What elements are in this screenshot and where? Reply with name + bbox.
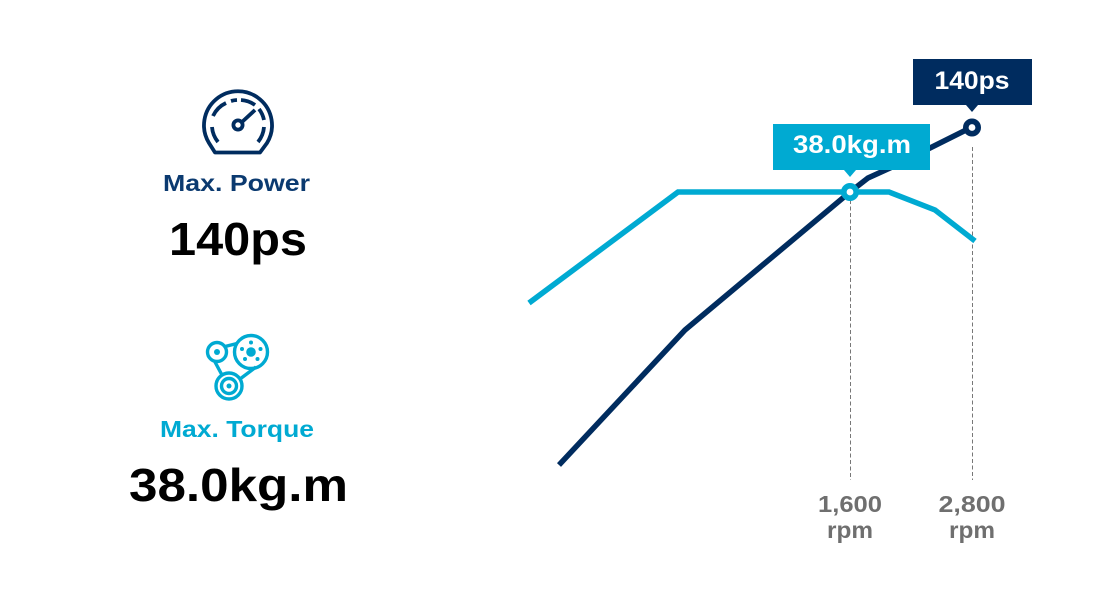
guide line: 2,800 rpm [972, 147, 974, 480]
guide line: 1,600 rpm [850, 200, 852, 480]
heading: max torque: Max. Torque [160, 416, 314, 442]
value: max torque: 38.0kg.m [129, 459, 348, 511]
axis label: 1,600 rpm: 1,600 [818, 491, 882, 517]
line chart [529, 59, 1032, 543]
icon: speedometer [204, 91, 272, 152]
callout: 38.0kg.m: 38.0kg.m [793, 131, 911, 159]
axis label: 2,800 rpm: rpm [949, 517, 995, 543]
marker: power peak [966, 121, 978, 134]
axis label: 1,600 rpm [818, 491, 882, 543]
power curve [559, 127, 972, 465]
callout: 140ps [913, 59, 1032, 112]
icon: belt pulleys [208, 336, 268, 399]
axis label: 2,800 rpm: 2,800 [938, 491, 1006, 517]
torque curve [529, 192, 975, 303]
value: max power: 140ps [169, 213, 307, 265]
heading: max power: Max. Power [163, 170, 310, 196]
axis label: 2,800 rpm [938, 491, 1006, 543]
callout: 140ps: 140ps [934, 67, 1010, 95]
axis label: 1,600 rpm: rpm [827, 517, 873, 543]
callout: 38.0kg.m [773, 124, 930, 177]
marker: torque peak [844, 186, 856, 198]
